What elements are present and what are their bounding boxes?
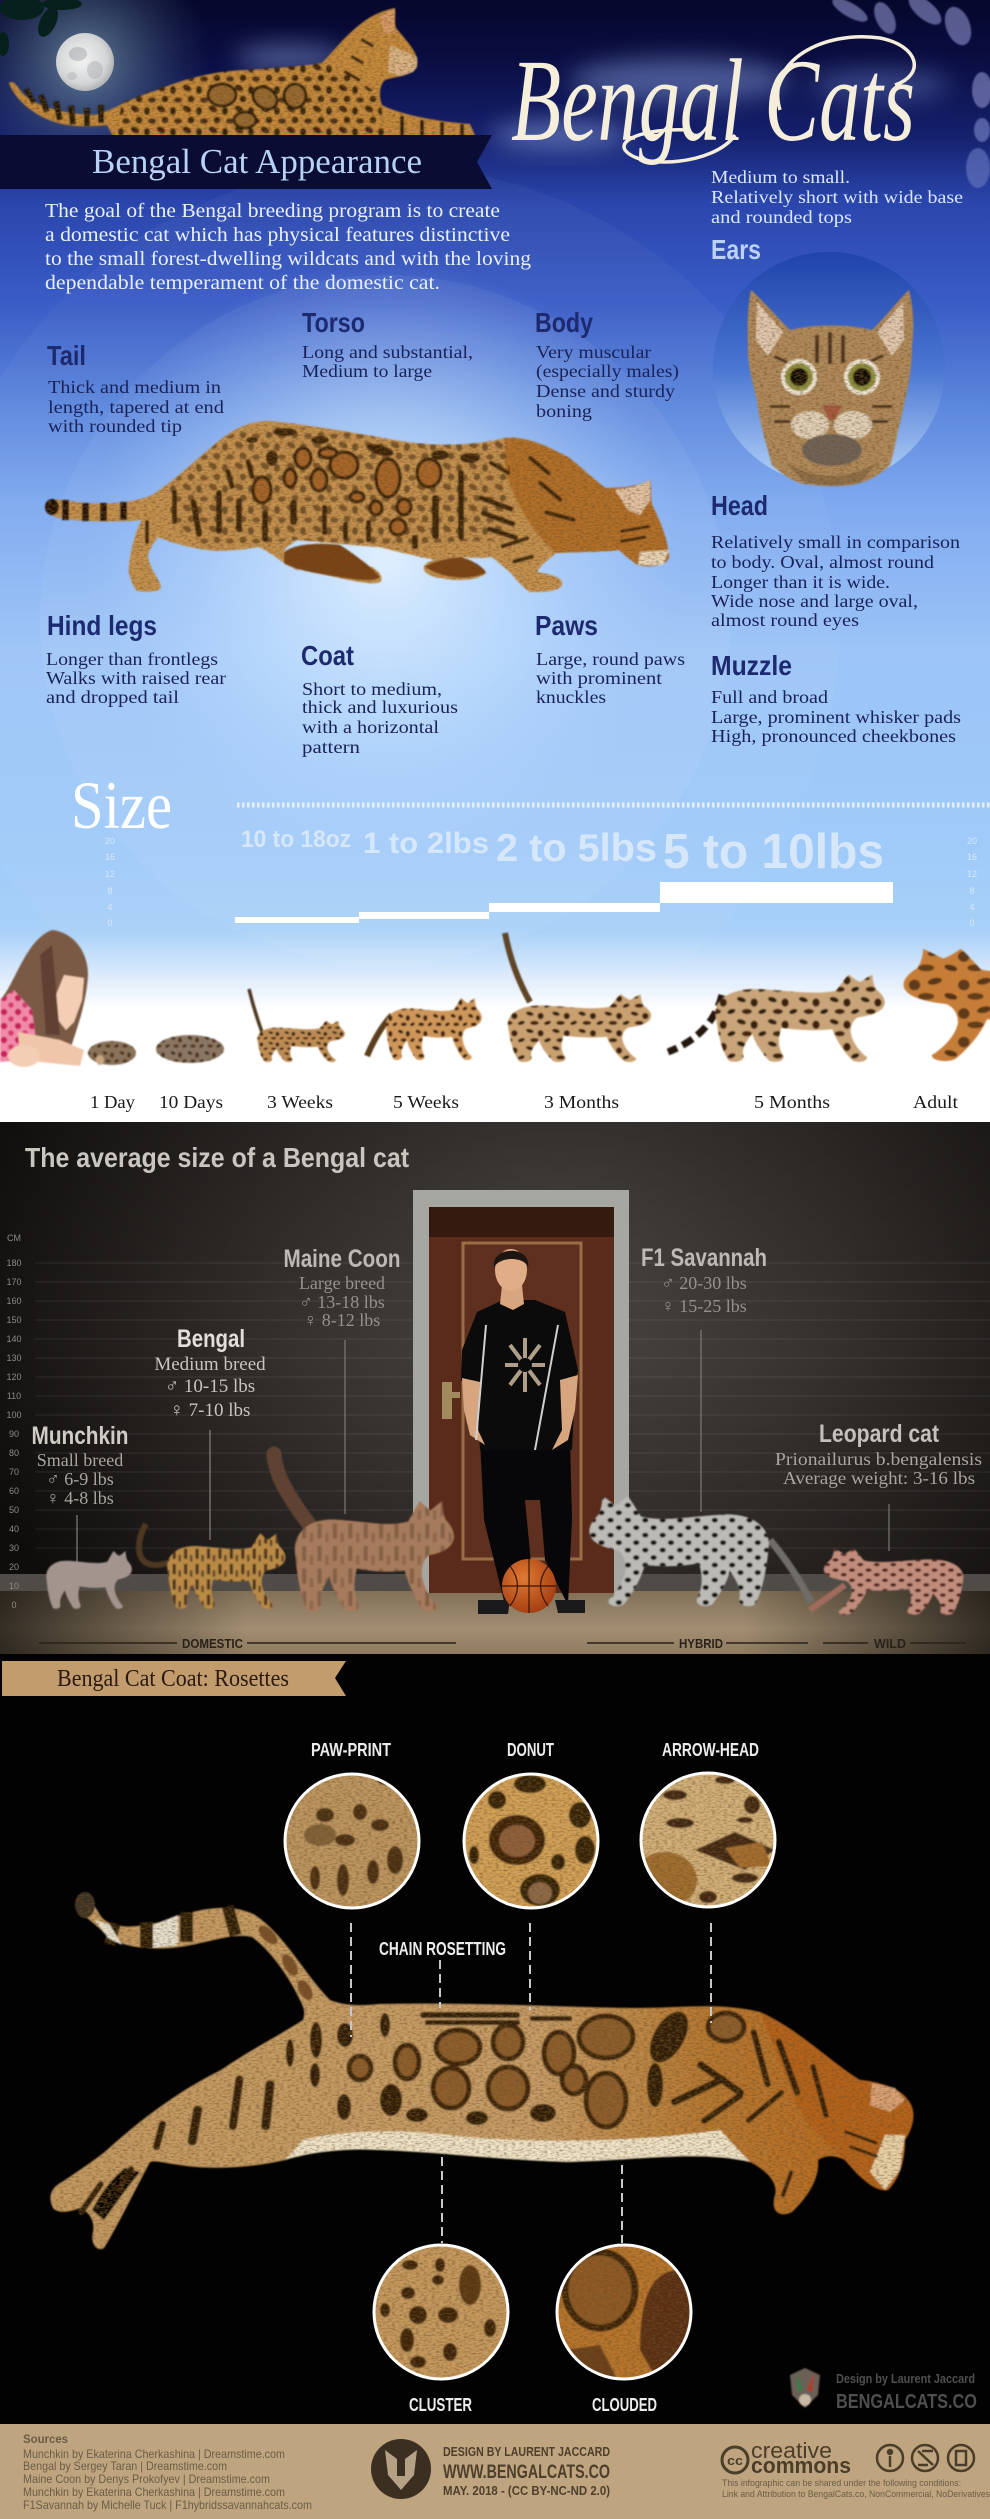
footer credit: DESIGN BY LAURENT JACCARD	[443, 2444, 610, 2459]
height scale: 140	[6, 1334, 22, 1344]
age labels: 3 Weeks	[267, 1092, 333, 1112]
text block: ears: and rounded tops	[711, 207, 852, 227]
illustration: 3 months kitten	[505, 933, 651, 1062]
label: chain rosetting: CHAIN ROSETTING	[379, 1939, 506, 1959]
label: Munchkin: Munchkin	[32, 1422, 128, 1450]
heading: Paws: Paws	[535, 610, 598, 641]
license text	[722, 2478, 990, 2500]
text block: ears: Medium to small.	[711, 167, 850, 187]
label: Bengal: ♀ 7-10 lbs	[170, 1400, 250, 1421]
illustration: leopard cat	[810, 1548, 963, 1615]
height scale: 70	[9, 1467, 19, 1477]
right axis	[967, 836, 977, 928]
illustration: bengal cat	[139, 1524, 285, 1609]
banner	[0, 135, 492, 189]
sources: Munchkin by Ekaterina Cherkashina | Dreamstime.com	[23, 2447, 285, 2461]
height scale: 30	[9, 1543, 19, 1553]
height scale: 110	[7, 1391, 21, 1401]
label: Munchkin: ♀ 4-8 lbs	[46, 1488, 114, 1508]
license icons	[877, 2445, 974, 2471]
sources: Sources	[23, 2432, 68, 2446]
illustration: savannah cat	[589, 1496, 811, 1606]
icon: moon	[56, 33, 114, 91]
age labels: 5 Weeks	[393, 1092, 459, 1112]
banner: rosettes heading: Bengal Cat Coat: Rosettes	[57, 1666, 289, 1692]
inset: cluster coat	[370, 2240, 514, 2384]
label: F1 Savannah	[641, 1244, 767, 1512]
license text: This infographic can be shared under the following conditions:	[722, 2478, 961, 2489]
label: donut: DONUT	[507, 1740, 554, 1760]
weight labels: 1 to 2lbs	[363, 827, 489, 860]
illustration: girl	[0, 930, 88, 1067]
right axis: 20	[967, 836, 977, 846]
text block: coat	[301, 640, 458, 757]
heading: Coat: Coat	[301, 640, 354, 671]
label: Bengal: ♂ 10-15 lbs	[165, 1376, 255, 1397]
wall background	[0, 1122, 990, 1592]
height scale: 170	[6, 1277, 22, 1287]
label: F1 Savannah: ♂ 20-30 lbs	[661, 1273, 747, 1293]
text block: body	[535, 307, 679, 421]
height scale: 90	[9, 1429, 19, 1439]
label: Maine Coon	[284, 1245, 400, 1514]
label: paw-print: PAW-PRINT	[311, 1740, 391, 1760]
text block: paws: knuckles	[536, 687, 606, 707]
illustration: cat on banner	[9, 8, 476, 138]
sources	[23, 2432, 312, 2512]
text block: coat: pattern	[302, 737, 360, 757]
illustration: main bengal cat	[45, 421, 669, 592]
age labels: 5 Months	[754, 1092, 830, 1112]
age labels: 3 Months	[544, 1092, 619, 1112]
text block: torso: Medium to large	[302, 361, 432, 381]
age labels: Adult	[913, 1092, 958, 1112]
heading: Hind legs: Hind legs	[47, 610, 157, 641]
height scale: 20	[9, 1562, 19, 1572]
height scale: 80	[9, 1448, 19, 1458]
text block: head: Longer than it is wide.	[711, 572, 890, 592]
right axis: 4	[969, 902, 975, 912]
sources: Munchkin by Ekaterina Cherkashina | Dreamstime.com	[23, 2485, 285, 2499]
logo: footer badge	[371, 2439, 431, 2499]
icon: leaves top right	[829, 0, 990, 188]
heading: Torso: Torso	[302, 307, 365, 338]
category axis: domestic hybrid wild: DOMESTIC	[182, 1636, 244, 1651]
text block: torso: Long and substantial,	[302, 342, 473, 362]
illustration: cat face in circle	[713, 252, 945, 486]
sky background	[0, 0, 990, 1122]
panel: footer	[0, 2424, 990, 2519]
illustration: rosette cat	[50, 1892, 913, 2249]
creative commons mark: creative	[751, 2438, 832, 2463]
illustration: maine coon cat	[274, 1454, 454, 1612]
label: Bengal	[154, 1325, 266, 1540]
height scale: 60	[9, 1486, 19, 1496]
illustration: man	[461, 1249, 585, 1614]
sources: F1Savannah by Michelle Tuck | F1hybridssavannahcats.com	[23, 2498, 312, 2512]
text block: ears	[711, 167, 963, 227]
weight labels: 2 to 5lbs	[496, 827, 657, 870]
label: Leopard cat	[775, 1420, 982, 1551]
text block: torso	[302, 307, 473, 381]
intro text: The goal of the Bengal breeding program is to create	[45, 200, 500, 222]
text block: tail: with rounded tip	[48, 416, 182, 436]
label: arrow-head: ARROW-HEAD	[662, 1740, 759, 1760]
sources: Bengal by Sergey Taran | Dreamstime.com	[23, 2459, 227, 2473]
illustration: 5 weeks kitten	[367, 998, 482, 1060]
heading: Head: Head	[711, 490, 768, 521]
illustration: adult cat	[904, 949, 990, 1061]
weight labels	[241, 825, 884, 879]
text block: muzzle: Large, prominent whisker pads	[711, 707, 961, 727]
text block: muzzle: Full and broad	[711, 687, 828, 707]
left axis: 8	[107, 886, 113, 896]
intro text	[45, 200, 531, 294]
illustration: 5 months cat	[668, 974, 885, 1062]
label: Munchkin: Small breed	[37, 1450, 123, 1470]
height scale: 100	[6, 1410, 22, 1420]
left axis: 20	[105, 836, 115, 846]
label: Maine Coon: Maine Coon	[284, 1245, 400, 1273]
panel: size growth chart	[0, 767, 990, 1112]
heading: Size: Size	[71, 767, 172, 843]
text block: muzzle: High, pronounced cheekbones	[711, 726, 956, 746]
text block: head	[711, 490, 960, 630]
connector lines	[351, 1923, 711, 2243]
right axis: 12	[967, 869, 977, 879]
text block: paws: Large, round paws	[536, 649, 685, 669]
label: cluster: CLUSTER	[409, 2395, 472, 2415]
text block: hind legs: Walks with raised rear	[46, 668, 226, 688]
age labels: 10 Days	[159, 1092, 223, 1112]
height scale: 130	[6, 1353, 22, 1363]
text block: muzzle	[711, 650, 961, 746]
height scale	[6, 1233, 22, 1610]
creative commons mark: commons	[751, 2453, 851, 2478]
category axis: domestic hybrid wild: WILD	[874, 1636, 906, 1651]
creative commons mark	[722, 2438, 851, 2478]
category axis: domestic hybrid wild	[39, 1636, 966, 1651]
text block: tail: Thick and medium in	[48, 377, 221, 397]
banner: rosettes heading	[2, 1661, 346, 1696]
inset: arrow-head coat	[640, 1772, 776, 1908]
inset: clouded coat	[556, 2244, 692, 2380]
panel: appearance	[0, 0, 990, 1122]
illustration: 1 day kitten	[88, 1041, 136, 1065]
intro text: to the small forest-dwelling wildcats and with the loving	[45, 248, 531, 270]
left axis: 12	[105, 869, 115, 879]
age labels: 1 Day	[90, 1092, 135, 1112]
text block: body: boning	[536, 401, 592, 421]
text block: coat: with a horizontal	[302, 717, 439, 737]
height scale: CM	[7, 1233, 21, 1243]
text block: paws	[535, 610, 685, 707]
logo: cat mask	[790, 2368, 820, 2408]
floor	[0, 1591, 990, 1654]
label: clouded: CLOUDED	[592, 2395, 657, 2415]
creative commons mark: cc	[727, 2453, 743, 2468]
label: Leopard cat: Prionailurus b.bengalensis	[775, 1449, 982, 1469]
height scale: 160	[6, 1296, 22, 1306]
label: Maine Coon: ♂ 13-18 lbs	[299, 1292, 385, 1312]
text block: ears: Relatively short with wide base	[711, 187, 963, 207]
left axis: 16	[105, 852, 115, 862]
right axis: 0	[969, 918, 975, 928]
label: F1 Savannah: ♀ 15-25 lbs	[661, 1296, 747, 1316]
heading: Bengal Cat Appearance: Bengal Cat Appearance	[92, 142, 422, 181]
illustration: 3 weeks kitten	[249, 989, 345, 1062]
text block: hind legs: Longer than frontlegs	[46, 649, 218, 669]
text block: paws: with prominent	[536, 668, 662, 688]
text block: head: Wide nose and large oval,	[711, 591, 918, 611]
height scale: 120	[6, 1372, 22, 1382]
text block: body: Very muscular	[536, 342, 651, 362]
height scale: 50	[9, 1505, 19, 1515]
illustration: basketball	[502, 1559, 556, 1613]
text block: head: to body. Oval, almost round	[711, 552, 934, 572]
left axis: 4	[107, 902, 113, 912]
height scale: 0	[11, 1600, 17, 1610]
right axis: 8	[969, 886, 975, 896]
label: Munchkin: ♂ 6-9 lbs	[46, 1469, 114, 1489]
label: Maine Coon: ♀ 8-12 lbs	[304, 1310, 380, 1330]
text block: hind legs	[46, 610, 226, 707]
label: Bengal: Bengal	[177, 1325, 245, 1353]
panel: rosettes	[0, 1654, 990, 2424]
text block: coat: thick and luxurious	[302, 697, 458, 717]
age labels	[90, 1092, 958, 1112]
heading: average size: The average size of a Bengal cat	[25, 1142, 409, 1173]
intro text: a domestic cat which has physical features distinctive	[45, 224, 510, 246]
text block: hind legs: and dropped tail	[46, 687, 179, 707]
footer credit: MAY. 2018 - (CC BY-NC-ND 2.0)	[443, 2483, 610, 2498]
panel: average size comparison	[0, 1122, 990, 1684]
inset: paw-print coat	[280, 1770, 424, 1914]
text block: body: Dense and sturdy	[536, 381, 675, 401]
text block: body: (especially males)	[536, 361, 679, 381]
left axis: 0	[107, 918, 113, 928]
left axis	[105, 836, 115, 928]
text block: tail: length, tapered at end	[48, 397, 224, 417]
weight labels: 5 to 10lbs	[663, 825, 884, 879]
inset: donut coat	[460, 1770, 604, 1914]
intro text: dependable temperament of the domestic cat.	[45, 272, 440, 294]
heading: Muzzle: Muzzle	[711, 650, 792, 681]
height scale: 10	[9, 1581, 19, 1591]
label: Leopard cat: Leopard cat	[819, 1420, 940, 1448]
illustration: munchkin cat	[46, 1551, 132, 1609]
heading: Ears: Ears	[711, 234, 761, 265]
category axis: domestic hybrid wild: HYBRID	[679, 1636, 723, 1651]
label: F1 Savannah: F1 Savannah	[641, 1244, 767, 1272]
text block: coat: Short to medium,	[302, 679, 442, 699]
footer credit	[443, 2444, 610, 2498]
illustration: 10 days kitten	[156, 1035, 224, 1063]
icon: leaves top left	[0, 0, 82, 56]
height scale: 40	[9, 1524, 19, 1534]
right axis: 16	[967, 852, 977, 862]
black background	[0, 1654, 990, 2424]
text block: tail	[47, 340, 224, 436]
illustration: door	[413, 1190, 629, 1593]
heading: Tail: Tail	[47, 340, 86, 371]
bar chart	[235, 882, 893, 923]
heading: Body: Body	[535, 307, 593, 338]
label: Maine Coon: Large breed	[299, 1273, 385, 1293]
height scale: 180	[6, 1258, 22, 1268]
label: Leopard cat: Average weight: 3-16 lbs	[783, 1468, 975, 1488]
weight labels: 10 to 18oz	[241, 826, 351, 853]
label: Munchkin	[32, 1422, 128, 1566]
text block: head: almost round eyes	[711, 610, 859, 630]
height scale: 150	[6, 1315, 22, 1325]
footer credit: WWW.BENGALCATS.CO	[443, 2462, 610, 2483]
credit text	[836, 2371, 977, 2413]
text block: head: Relatively small in comparison	[711, 532, 960, 552]
label: Bengal: Medium breed	[154, 1354, 266, 1375]
sources: Maine Coon by Denys Prokofyev | Dreamstime.com	[23, 2472, 270, 2486]
